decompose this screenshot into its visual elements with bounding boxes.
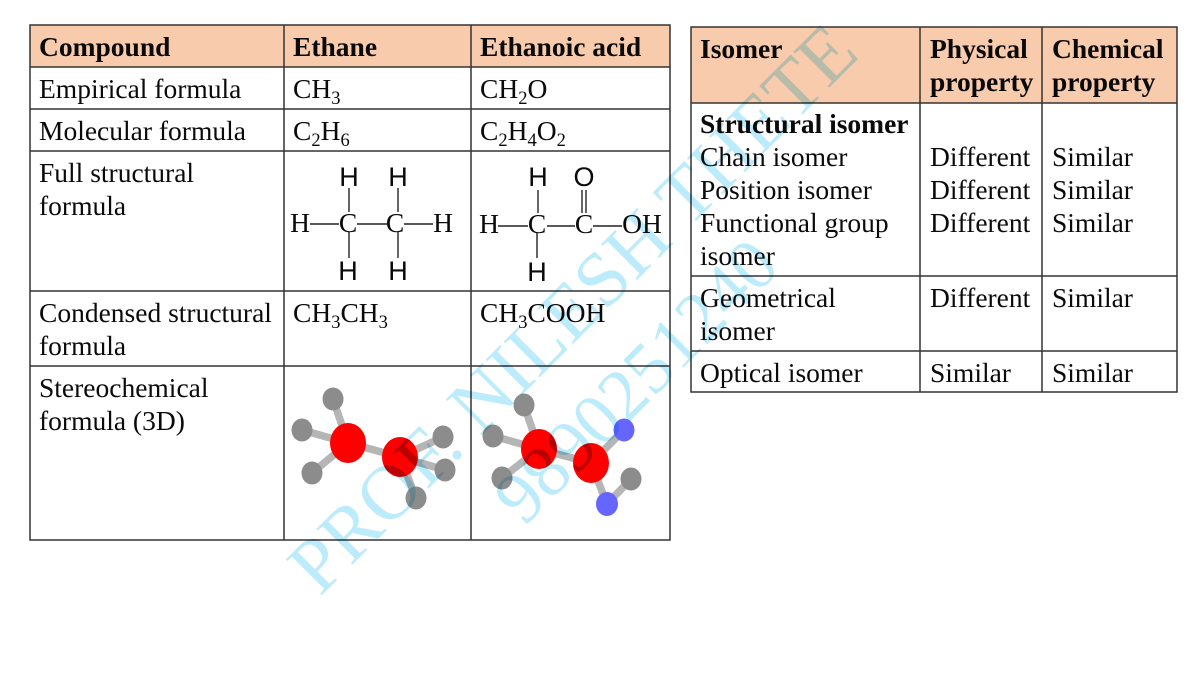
row: structural isomers: Different — [930, 174, 1031, 205]
table header labels: Ethane — [293, 31, 377, 62]
structural formula: ethanoic acid: O — [573, 162, 595, 192]
row: condensed structural formula: Condensed structural — [39, 297, 272, 328]
row: structural isomers: Functional group — [700, 207, 889, 238]
structural formula: ethanoic acid: C — [575, 208, 593, 239]
structural formula: ethane: H — [388, 162, 408, 192]
structural formula: ethane: H — [290, 207, 310, 238]
row: structural isomers: isomer — [700, 240, 775, 271]
row: structural isomers: Similar — [1052, 141, 1133, 172]
row: geometrical isomer: isomer — [700, 315, 775, 346]
isomer table header labels: property — [1052, 66, 1156, 97]
row: empirical formula: CH — [293, 73, 331, 104]
table header labels: Ethanoic acid — [480, 31, 641, 62]
table header background — [30, 25, 670, 67]
row: empirical formula: 3 — [331, 89, 340, 109]
structural formula: ethane — [290, 162, 453, 286]
isomer table header background — [691, 27, 1177, 103]
row: structural isomers: Similar — [1052, 207, 1133, 238]
row: geometrical isomer: Different — [930, 282, 1031, 313]
structural formula: ethanoic acid: OH — [622, 208, 662, 239]
row: molecular formula: O — [537, 115, 557, 146]
row: condensed structural formula: formula — [39, 330, 126, 361]
row: geometrical isomer — [700, 282, 1133, 346]
row label: full structural formula: formula — [39, 190, 126, 221]
row: empirical formula: 2 — [518, 89, 527, 109]
structural formula: ethane: H — [339, 162, 359, 192]
row: structural isomers — [700, 108, 1133, 271]
row: geometrical isomer: Similar — [1052, 282, 1133, 313]
row: molecular formula: C — [480, 115, 498, 146]
row: molecular formula: 2 — [498, 131, 508, 151]
isomer table header labels: Isomer — [700, 33, 782, 64]
row label: full structural formula — [39, 157, 194, 221]
row: condensed structural formula: 3 — [518, 313, 527, 333]
row: empirical formula: O — [527, 73, 547, 104]
row: condensed structural formula: CH — [293, 297, 331, 328]
structural formula: ethanoic acid — [479, 162, 662, 287]
structural formula: ethane: C — [339, 207, 357, 238]
row: optical isomer: Similar — [1052, 357, 1133, 388]
structural formula: ethanoic acid: C — [528, 208, 546, 239]
row: structural isomers: Different — [930, 141, 1031, 172]
row: empirical formula: Empirical formula — [39, 73, 241, 104]
table header labels — [39, 31, 641, 62]
row: molecular formula: 4 — [527, 131, 537, 151]
row: molecular formula: C — [293, 115, 311, 146]
row: condensed structural formula: COOH — [527, 297, 606, 328]
watermark: name: PROF. NILESH THETE — [271, 7, 873, 609]
row: molecular formula: 6 — [340, 131, 350, 151]
row: structural isomers: Different — [930, 207, 1031, 238]
row: empirical formula — [39, 73, 547, 109]
structural formula: ethane: H — [433, 207, 453, 238]
row: structural isomers: Position isomer — [700, 174, 872, 205]
row: condensed structural formula: CH — [480, 297, 518, 328]
watermark: phone number: 9890251240 — [478, 223, 793, 538]
row: molecular formula: 2 — [311, 131, 321, 151]
3D model: ethanoic acid — [482, 394, 642, 516]
panel: isomer properties table — [691, 27, 1177, 392]
row: molecular formula: 2 — [557, 131, 566, 151]
row: condensed structural formula: 3 — [379, 313, 388, 333]
row: structural isomers: Structural isomer — [700, 108, 908, 139]
isomer table header labels: Chemical — [1052, 33, 1164, 64]
row: optical isomer: Similar — [930, 357, 1011, 388]
table header labels: Compound — [39, 31, 170, 62]
row: structural isomers: Chain isomer — [700, 141, 847, 172]
row label: full structural formula: Full structural — [39, 157, 194, 188]
structural formula: ethanoic acid: H — [527, 257, 547, 287]
structural formula: ethane: H — [338, 256, 358, 286]
isomer table header labels: Physical — [930, 33, 1028, 64]
3D model: ethane — [292, 388, 456, 510]
row: structural isomers: Similar — [1052, 174, 1133, 205]
isomer table header labels — [700, 33, 1164, 97]
structural formula: ethanoic acid: H — [479, 208, 499, 239]
structural formula: ethanoic acid: H — [528, 162, 548, 192]
row: molecular formula: H — [508, 115, 528, 146]
table grid — [30, 25, 670, 540]
row label: stereochemical formula: formula (3D) — [39, 405, 185, 436]
row label: stereochemical formula — [39, 372, 209, 436]
row: condensed structural formula — [39, 297, 606, 361]
structural formula: ethane: H — [388, 256, 408, 286]
structural formula: ethane: C — [386, 207, 404, 238]
row: optical isomer — [700, 357, 1133, 388]
isomer table grid — [691, 27, 1177, 392]
row: molecular formula: H — [321, 115, 341, 146]
row: condensed structural formula: CH — [340, 297, 379, 328]
isomer table header labels: property — [930, 66, 1034, 97]
row label: stereochemical formula: Stereochemical — [39, 372, 209, 403]
row: optical isomer: Optical isomer — [700, 357, 863, 388]
row: molecular formula — [39, 115, 566, 151]
row: geometrical isomer: Geometrical — [700, 282, 836, 313]
row: empirical formula: CH — [480, 73, 518, 104]
row: molecular formula: Molecular formula — [39, 115, 246, 146]
row: condensed structural formula: 3 — [331, 313, 340, 333]
panel: compound formula table — [30, 25, 670, 540]
